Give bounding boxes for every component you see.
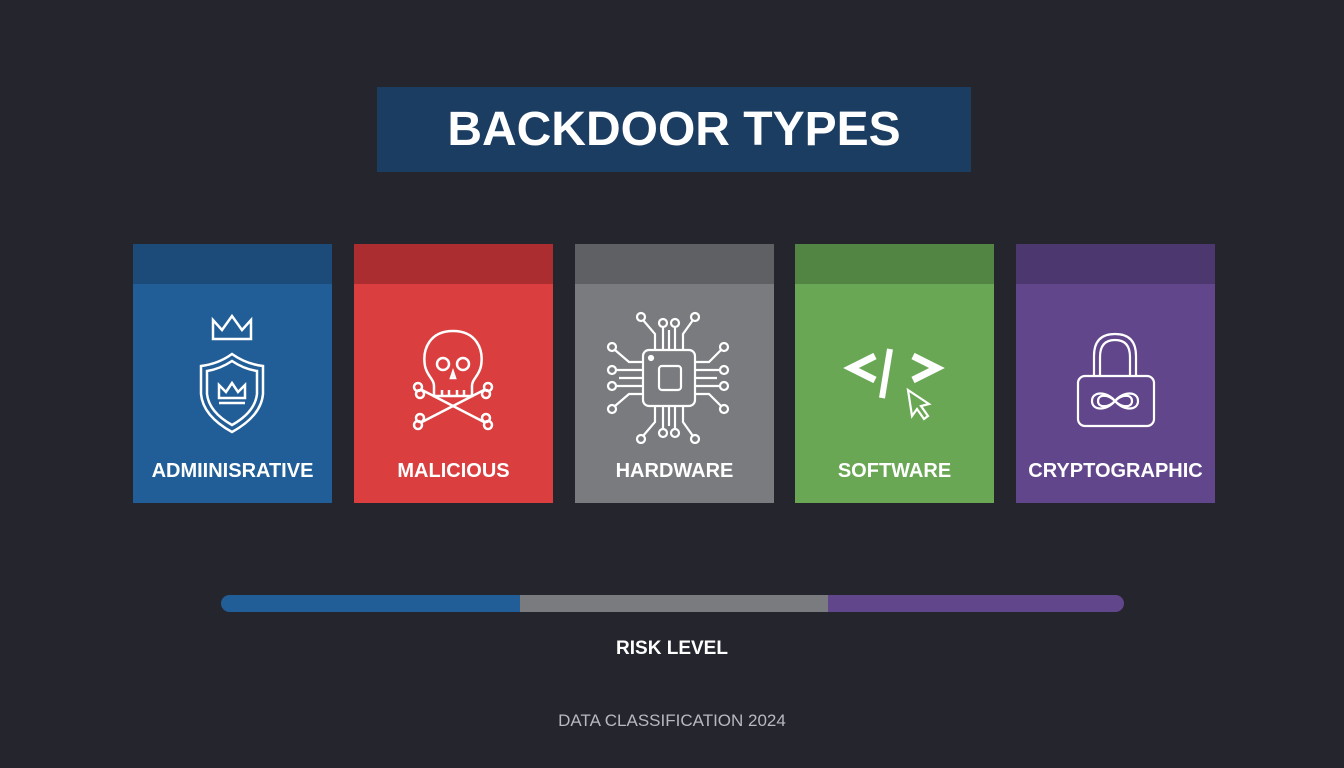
risk label: RISK LEVEL <box>616 638 728 659</box>
icon: skull <box>412 330 494 430</box>
card: hardware: HARDWARE <box>616 460 733 482</box>
card: hardware <box>575 244 774 503</box>
card: software: SOFTWARE <box>838 460 951 482</box>
icon: shield crown <box>200 314 264 434</box>
card: cryptographic <box>1016 244 1215 503</box>
card: malicious: MALICIOUS <box>397 460 510 482</box>
risk level bar <box>221 595 1124 612</box>
title: BACKDOOR TYPES <box>447 103 901 156</box>
card: malicious <box>354 244 553 503</box>
icon: lock infinity <box>1076 332 1156 428</box>
title <box>377 87 971 172</box>
card: administrative <box>133 244 332 503</box>
footer: DATA CLASSIFICATION 2024 <box>558 711 786 730</box>
card: administrative: ADMIINISRATIVE <box>152 460 313 482</box>
icon: chip <box>606 312 730 444</box>
card: software <box>795 244 994 503</box>
card: cryptographic: CRYPTOGRAPHIC <box>1028 460 1203 482</box>
icon: code cursor <box>843 348 945 420</box>
